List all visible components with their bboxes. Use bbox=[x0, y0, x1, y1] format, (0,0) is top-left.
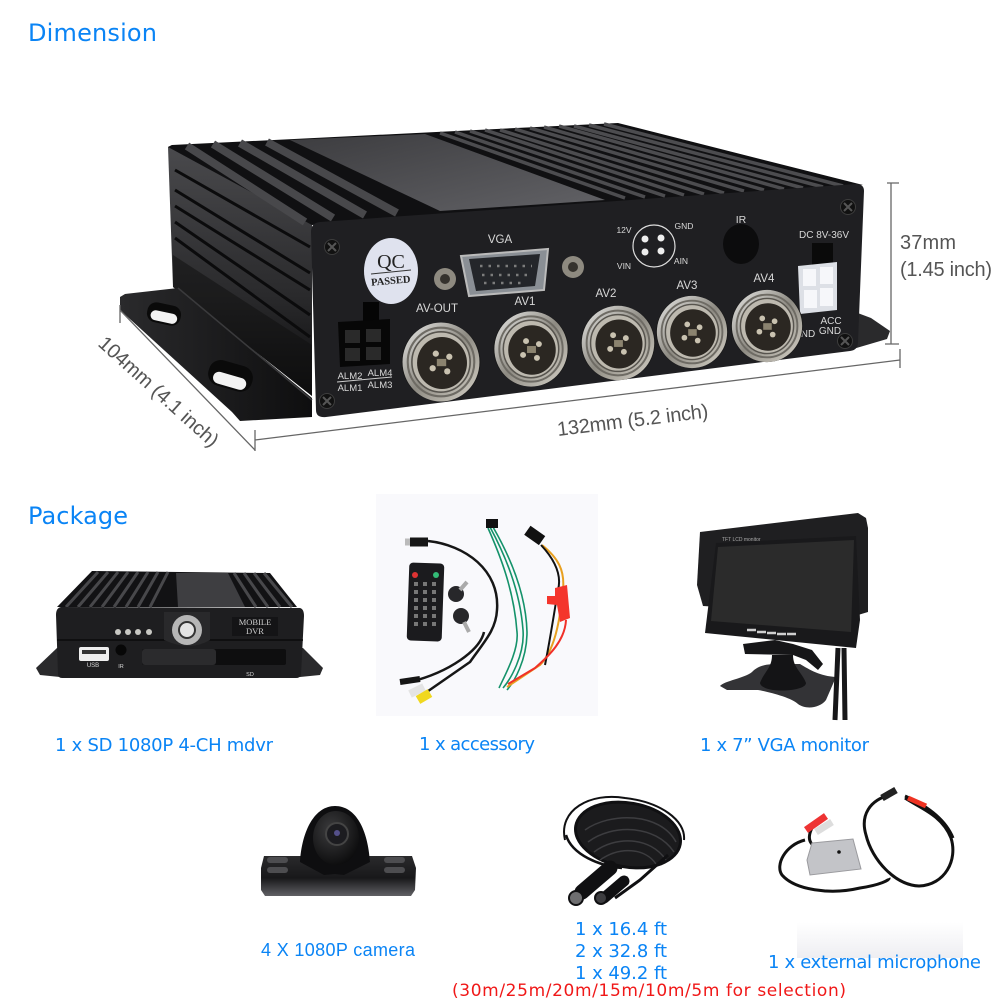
alarm connector: ALM2 bbox=[338, 371, 362, 382]
red and yellow harness bbox=[507, 526, 570, 687]
monitor body bbox=[705, 536, 860, 648]
front panel bbox=[311, 184, 864, 417]
package item: SD 4-CH mdvr: DVR bbox=[246, 626, 264, 636]
VGA and AV labels bbox=[416, 234, 775, 315]
alarm connector: ALM1 bbox=[338, 383, 362, 394]
label: cable lengths: 2 x 32.8 ft bbox=[575, 941, 667, 962]
4-pin diagram bbox=[616, 221, 693, 271]
dimension label: height: 37mm bbox=[900, 232, 956, 254]
power connector: GND bbox=[819, 326, 841, 337]
panel screws bbox=[320, 200, 856, 408]
microphone plugs bbox=[806, 790, 926, 832]
package item: microphone bbox=[780, 790, 963, 958]
package item: camera bbox=[261, 806, 416, 896]
package item: SD 4-CH mdvr: MOBILE bbox=[239, 617, 271, 627]
heading: Package: Package bbox=[28, 502, 128, 530]
VGA and AV labels: AV1 bbox=[515, 296, 535, 308]
power connector: DC 8V-36V bbox=[799, 230, 849, 241]
4-pin diagram: GND bbox=[675, 221, 693, 231]
VGA and AV labels: VGA bbox=[488, 234, 512, 246]
package item: 7 inch monitor bbox=[697, 513, 868, 720]
package item: 7 inch monitor: TFT LCD monitor bbox=[722, 537, 761, 543]
alarm connector bbox=[337, 302, 392, 394]
dimension arrows bbox=[120, 183, 900, 451]
IR window bbox=[723, 214, 759, 264]
label: cable lengths: 1 x 49.2 ft bbox=[575, 963, 667, 984]
monitor screen bbox=[711, 540, 854, 632]
power connector: ND bbox=[801, 329, 815, 340]
remote control bbox=[407, 562, 444, 642]
mounting plate right bbox=[853, 312, 890, 349]
faint photo backing bbox=[797, 922, 963, 958]
monitor stand bbox=[720, 640, 836, 707]
label: monitor: 1 x 7” VGA monitor bbox=[700, 735, 870, 756]
monitor sunshade bbox=[697, 513, 868, 615]
4-pin diagram: 12V bbox=[616, 225, 632, 235]
label: mdvr: 1 x SD 1080P 4-CH mdvr bbox=[55, 735, 274, 756]
alarm connector: ALM4 bbox=[368, 368, 392, 379]
QC passed sticker: PASSED bbox=[371, 274, 411, 289]
monitor cables bbox=[835, 648, 845, 720]
4-pin diagram: VIN bbox=[617, 261, 631, 271]
VGA and AV labels: AV2 bbox=[596, 288, 616, 300]
VGA and AV labels: AV3 bbox=[677, 280, 697, 292]
label: accessory: 1 x accessory bbox=[419, 734, 535, 755]
power connector bbox=[798, 230, 849, 340]
package item: SD 4-CH mdvr: IR bbox=[118, 664, 124, 670]
IR window: IR bbox=[736, 214, 747, 226]
heading: Dimension: Dimension bbox=[28, 19, 157, 47]
microphone box bbox=[807, 839, 861, 875]
dimension label: height bbox=[900, 232, 992, 281]
package item: SD 4-CH mdvr: SD bbox=[246, 672, 254, 678]
package item: extension cable bbox=[564, 794, 686, 905]
monitor buttons bbox=[747, 630, 796, 634]
AV cable bbox=[400, 541, 497, 700]
main DVR device, rear view bbox=[120, 123, 890, 421]
top heat-sink face bbox=[168, 123, 863, 225]
QC passed sticker: QC bbox=[377, 251, 405, 273]
VGA and AV labels: AV4 bbox=[754, 273, 775, 285]
label: camera: 4 X 1080P camera bbox=[261, 940, 416, 960]
side heat-sink face bbox=[168, 145, 312, 396]
alarm connector: ALM3 bbox=[368, 380, 392, 391]
keys bbox=[448, 582, 469, 632]
package item: accessory bbox=[376, 494, 598, 716]
dimension label: depth: 104mm (4.1 inch) bbox=[94, 332, 223, 452]
VGA port bbox=[434, 249, 584, 296]
QC passed sticker bbox=[364, 238, 418, 304]
VGA and AV labels: AV-OUT bbox=[416, 303, 458, 315]
dimension label: height: (1.45 inch) bbox=[900, 259, 992, 281]
power connector: ACC bbox=[820, 316, 842, 327]
label: cable lengths: 1 x 16.4 ft bbox=[575, 919, 667, 940]
package item: SD 4-CH mdvr: USB bbox=[87, 663, 99, 669]
green harness bbox=[486, 519, 527, 690]
4-pin diagram: AIN bbox=[674, 256, 688, 266]
package item: SD 4-CH mdvr bbox=[36, 571, 323, 678]
microphone cables bbox=[780, 795, 953, 891]
mounting plate left bbox=[120, 288, 312, 421]
aviation connectors bbox=[401, 290, 803, 402]
label: cable lengths bbox=[575, 919, 667, 984]
dimension label: width: 132mm (5.2 inch) bbox=[556, 401, 709, 441]
label: microphone: 1 x external microphone bbox=[768, 952, 981, 973]
